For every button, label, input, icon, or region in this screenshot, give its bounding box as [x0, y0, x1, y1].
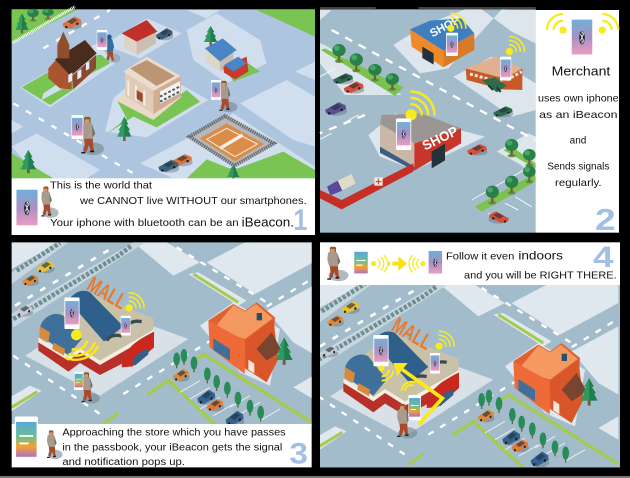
red shop: SHOP: [420, 123, 460, 153]
fence: [13, 7, 75, 43]
bank: [115, 57, 182, 120]
wall sign: [374, 177, 383, 186]
phone icon: [15, 184, 39, 232]
road dashes: [13, 10, 133, 173]
signal, red shop: [396, 92, 434, 150]
caption text: This is the world that: [50, 180, 152, 191]
caption text: we CANNOT live WITHOUT our smartphones.: [79, 196, 307, 207]
signal at storefront: [65, 330, 98, 360]
signal, brick shop: [500, 37, 524, 81]
panel 3: approaching the store: [10, 239, 317, 471]
yellow route arrow: [393, 363, 442, 424]
person with phone, top: [97, 30, 120, 63]
signal at storefront: [378, 365, 415, 391]
panel 2 top rule: [320, 6, 536, 9]
bottom edge band: [0, 476, 630, 478]
caption text: Your iphone with bluetooth can be an: [50, 218, 239, 229]
top left trees: [16, 9, 54, 33]
person icon: [327, 247, 348, 281]
number 3: 3: [289, 438, 308, 471]
merchant side panel: [536, 10, 619, 237]
phone beacon: [428, 247, 443, 278]
merchant text: as an iBeacon: [539, 110, 617, 121]
caption text: [62, 428, 286, 468]
parking lines: [320, 68, 536, 220]
caption text: in the passbook, your iBeacon gets the signal: [62, 443, 282, 454]
header panel 4: [320, 241, 620, 285]
merchant text: [538, 64, 619, 189]
person icon: [47, 430, 63, 459]
orange car: [63, 16, 82, 29]
brick shop: [466, 57, 522, 92]
merchant text: regularly.: [555, 178, 602, 189]
blue roof house: [205, 38, 248, 79]
church: [48, 32, 97, 89]
merchant phone with signals: [547, 14, 618, 61]
red wall: [320, 163, 413, 209]
number 4: 4: [593, 241, 614, 274]
red roof house: [122, 20, 157, 55]
header text: and you will be RIGHT THERE.: [464, 271, 617, 282]
header text: [446, 250, 617, 282]
number 2: 2: [595, 203, 616, 237]
signal, blue shop: [446, 13, 466, 56]
street trees: [332, 44, 536, 205]
signal arrow sequence: [371, 255, 426, 272]
person following: [397, 395, 421, 438]
parked cars: [325, 73, 513, 224]
blue shop: SHOP: [428, 14, 462, 40]
merchant text: Sends signals: [547, 161, 610, 172]
merchant text: Merchant: [552, 64, 611, 78]
phone received: [353, 248, 369, 278]
pine beside blue house: [204, 26, 217, 45]
truck: [327, 174, 356, 195]
green verges: [321, 48, 536, 212]
caption text: and notification pops up.: [62, 457, 185, 468]
road blocks: [12, 10, 315, 178]
person with phone, front: [71, 115, 104, 155]
caption text: iBeacon.: [242, 216, 294, 230]
header text: Follow it even: [446, 252, 514, 263]
mall scene: [315, 242, 622, 470]
blue car: [156, 28, 173, 40]
merchant text: and: [570, 136, 586, 147]
caption panel 3: [12, 416, 312, 471]
mall beacon phones: [373, 331, 454, 374]
red shop: [380, 113, 461, 171]
panel 1: the world: [12, 7, 315, 237]
parked cars: [158, 154, 193, 173]
caption text: [50, 180, 307, 230]
merchant text: uses own iphone: [538, 94, 619, 105]
mall beacon phones: [64, 293, 144, 336]
notification phone: [15, 416, 38, 464]
block surfaces: [320, 9, 536, 177]
caption panel 1: [12, 178, 315, 237]
number 1: 1: [293, 204, 307, 237]
road dashes: [320, 30, 535, 140]
person approaching: [74, 372, 100, 403]
green lawns: [12, 10, 315, 178]
trees: [21, 117, 239, 180]
caption text: Approaching the store which you have passes: [62, 428, 286, 439]
panel 2: merchant: [320, 8, 619, 237]
header text: indoors: [518, 250, 563, 263]
person with phone, right: [211, 80, 237, 112]
mall scene: [10, 239, 317, 429]
tennis court: [189, 116, 274, 166]
panel 4: follow indoors: [315, 241, 622, 470]
blue shop: [410, 14, 474, 67]
person icon: [41, 187, 58, 218]
